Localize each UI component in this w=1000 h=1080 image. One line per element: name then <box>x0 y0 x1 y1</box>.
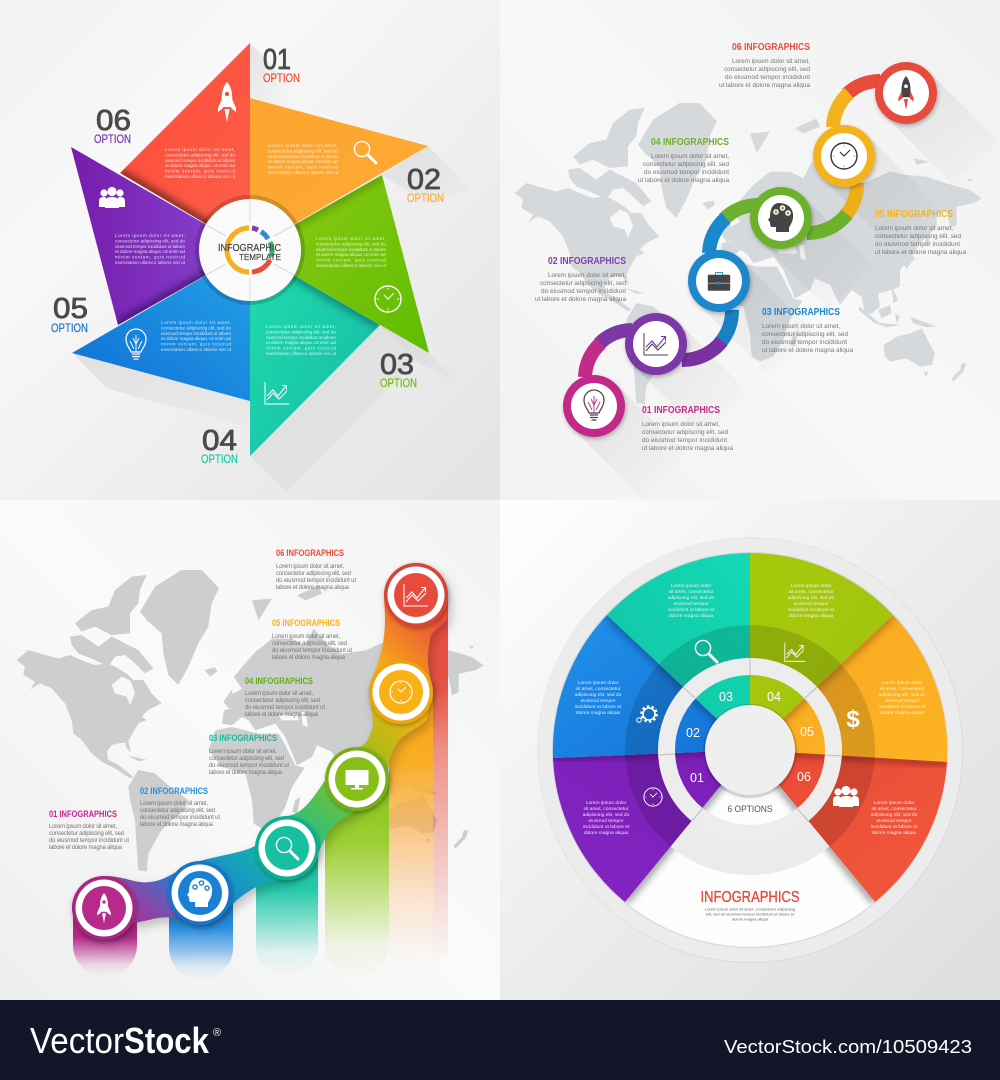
sector text 06: sit amet, consectetur <box>871 806 917 812</box>
caption 05: consectetur adipiscing elit, sed <box>875 233 961 240</box>
text block orange: minim veniam, quis nostrud <box>268 165 338 170</box>
text block red: Lorem ipsum dolor sit amet, <box>165 147 235 152</box>
text block orange <box>268 143 339 175</box>
caption 04: consectetur adipiscing elit, sed <box>643 161 729 168</box>
caption 06: 06 INFOGRAPHICS <box>732 42 810 53</box>
caption 03: labore et dolore magna aliqua <box>209 770 283 776</box>
caption 03: ut labore et dolore magna aliqua <box>762 347 853 354</box>
sector text 02 <box>575 680 622 716</box>
caption 05: do eiusmod tempor incididunt ut <box>272 648 352 654</box>
sector text 01: Lorem ipsum dolor <box>586 800 627 806</box>
caption 06: do eiusmod tempor incididunt <box>725 74 810 81</box>
label 06 option: 06 <box>96 105 131 137</box>
label 04 option: 04 <box>202 425 237 457</box>
sector text 02: Lorem ipsum dolor <box>578 680 619 686</box>
text block blue: minim veniam, quis nostrud <box>161 342 231 347</box>
text block purple: Lorem ipsum dolor sit amet, <box>115 233 185 238</box>
caption 02: do eiusmod tempor incididunt ut <box>140 815 220 821</box>
label 01 option <box>263 44 300 85</box>
text block green: minim veniam, quis nostrud <box>316 258 386 263</box>
wheel title: dolore magna aliqua <box>732 916 769 922</box>
caption 05: ut labore et dolore magna aliqua <box>875 249 966 256</box>
caption 01: consectetur adipiscing elit, sed <box>642 429 728 436</box>
sector text 03: sit amet, consectetur <box>668 589 714 595</box>
caption 01: ut labore et dolore magna aliqua <box>642 445 733 452</box>
caption 02: consectetur adipiscing elit, sed <box>540 280 626 287</box>
icon: chart <box>785 643 805 661</box>
grey ring <box>658 658 842 834</box>
sector numbers <box>686 690 814 785</box>
panel: world map winding path <box>500 0 1000 500</box>
caption 01: labore et dolore magna aliqua <box>49 845 123 851</box>
step 02 ring <box>168 861 232 925</box>
step 01 ring <box>72 876 136 940</box>
label 02 option <box>407 164 444 205</box>
panel: circular six options <box>500 500 1000 1000</box>
text block teal: eiusmod tempor incididunt ut labore <box>266 335 336 340</box>
segment 05 blue <box>72 276 250 401</box>
light band on white sector <box>670 821 830 875</box>
sector text 01: adipiscing elit, sed do <box>583 812 630 818</box>
sector text 01: sit amet, consectetur <box>583 806 629 812</box>
text block orange: exercitation ullamco laboris nisi ut <box>268 170 339 175</box>
world map <box>515 103 982 405</box>
sector text 05: incididunt ut labore et <box>879 704 926 710</box>
sector text 03: eiusmod tempor <box>673 601 709 607</box>
sector numbers: 04 <box>767 690 781 704</box>
wheel sector white <box>626 784 875 947</box>
step 05 circle <box>813 125 875 187</box>
wheel title <box>700 889 800 922</box>
sector text 03: dolore magna aliqua <box>669 613 713 619</box>
text block teal: et dolore magna aliqua. Ut enim ad <box>266 340 336 345</box>
segment 01 red <box>120 43 250 224</box>
text block purple: eiusmod tempor incididunt ut labore <box>115 244 185 249</box>
text block orange: Lorem ipsum dolor sit amet, <box>268 143 338 148</box>
icon: people <box>99 187 125 208</box>
sector numbers: 03 <box>719 690 733 704</box>
caption 01 <box>49 809 129 851</box>
caption 01: do eiusmod tempor incididunt <box>642 437 727 444</box>
rainbow ribbon <box>72 563 448 939</box>
text block green: exercitation ullamco laboris nisi ut <box>316 263 387 268</box>
sector text 03: Lorem ipsum dolor <box>671 583 712 589</box>
caption 03: Lorem ipsum dolor sit amet, <box>762 323 840 330</box>
caption 02: Lorem ipsum dolor sit amet, <box>140 801 208 807</box>
segment 02 orange <box>250 98 428 224</box>
caption 06: labore et dolore magna aliqua <box>276 585 350 591</box>
text block orange: et dolore magna aliqua. Ut enim ad <box>268 159 338 164</box>
wheel sector 04 green <box>750 553 893 719</box>
brand logo: ® <box>213 1027 221 1039</box>
caption 06: 06 INFOGRAPHICS <box>276 548 344 559</box>
caption 03: 03 INFOGRAPHICS <box>209 733 277 744</box>
sector text 03: adipiscing elit, sed do <box>668 595 715 601</box>
brand logo: Vector <box>30 1020 124 1061</box>
segment 03 green <box>294 175 429 353</box>
sector text 05: Lorem ipsum dolor <box>882 680 923 686</box>
text block teal: minim veniam, quis nostrud <box>266 346 336 351</box>
long shadows of the pinwheel <box>72 43 470 492</box>
icon: dollar: $ <box>846 706 860 733</box>
caption 06: do eiusmod tempor incididunt ut <box>276 578 356 584</box>
text block purple: exercitation ullamco laboris nisi ut <box>115 260 186 265</box>
label 06 option: OPTION <box>94 134 131 146</box>
sector text 06: adipiscing elit, sed do <box>871 812 918 818</box>
caption 04: ut labore et dolore magna aliqua <box>638 177 729 184</box>
wheel title: Lorem ipsum dolor sit amet, consectetur adipiscing <box>705 906 795 912</box>
sector text 01 <box>583 800 630 836</box>
caption 06: Lorem ipsum dolor sit amet, <box>732 58 810 65</box>
icon: magnifier <box>695 640 717 662</box>
label 05 option: OPTION <box>51 323 88 335</box>
caption 05: consectetur adipiscing elit, sed <box>272 641 347 647</box>
caption 03 <box>209 733 289 776</box>
label 03 option: 03 <box>380 349 414 381</box>
wheel sector 06 red <box>778 752 947 902</box>
text block green: Lorem ipsum dolor sit amet, <box>316 236 386 241</box>
sector numbers: 01 <box>690 771 704 785</box>
step 03 circle <box>688 250 750 312</box>
icon: rocket <box>218 82 236 122</box>
step 04 circle <box>750 187 812 249</box>
caption 05 <box>272 618 352 661</box>
text block teal: consectetur adipiscing elit, sed do <box>266 329 336 334</box>
caption 05: Lorem ipsum dolor sit amet, <box>272 634 340 640</box>
caption 04: labore et dolore magna aliqua <box>245 712 319 718</box>
icon: clock <box>375 286 401 312</box>
sector text 02: eiusmod tempor <box>580 698 616 704</box>
label 02 option: OPTION <box>407 193 444 205</box>
text block blue: exercitation ullamco laboris nisi ut <box>161 347 232 352</box>
image id: VectorStock.com/10509423 <box>724 1036 972 1057</box>
world map <box>17 570 484 872</box>
segment 04 teal <box>250 276 380 456</box>
text block green <box>316 236 387 268</box>
icon: gear <box>637 706 657 722</box>
caption 03: do eiusmod tempor incididunt <box>762 339 847 346</box>
caption 02 <box>140 786 220 828</box>
caption 06: consectetur adipiscing elit, sed <box>276 571 351 577</box>
brand logo: Stock <box>124 1020 210 1061</box>
text block purple: et dolore magna aliqua. Ut enim ad <box>115 249 185 254</box>
sector text 05: dolore magna aliqua <box>880 710 924 716</box>
sector text 04: dolore magna aliqua <box>789 613 833 619</box>
long shadows of circles <box>575 74 970 470</box>
label 05 option <box>51 293 88 335</box>
caption 01: Lorem ipsum dolor sit amet, <box>49 824 117 830</box>
wheel sector 05 orange <box>782 615 948 762</box>
text block red: et dolore magna aliqua. Ut enim ad <box>165 163 235 168</box>
caption 05: do eiusmod tempor incididunt <box>875 241 960 248</box>
text block green: eiusmod tempor incididunt ut labore <box>316 247 386 252</box>
caption 02: do eiusmod tempor incididunt <box>541 288 626 295</box>
caption 02: 02 INFOGRAPHICS <box>140 786 208 797</box>
text block purple <box>115 233 186 265</box>
sector numbers: 05 <box>800 725 814 739</box>
caption 01 <box>642 405 733 452</box>
wheel sector 02 blue <box>552 615 718 758</box>
caption 04: do eiusmod tempor incididunt ut <box>245 705 325 711</box>
winding connectors <box>585 81 880 377</box>
sector text 04 <box>788 583 835 619</box>
caption 03: 03 INFOGRAPHICS <box>762 307 840 318</box>
outer ring <box>537 537 963 963</box>
caption 06 <box>719 42 810 89</box>
label 03 option <box>380 349 417 390</box>
label 01 option: 01 <box>263 44 291 76</box>
ribbon shadow <box>75 568 451 944</box>
sector text 04: Lorem ipsum dolor <box>791 583 832 589</box>
sector text 06: dolore magna aliqua <box>872 830 916 836</box>
text block blue: consectetur adipiscing elit, sed do <box>161 325 231 330</box>
sector text 04: incididunt ut labore et <box>788 607 835 613</box>
wheel sector 01 purple <box>553 752 722 902</box>
caption 04 <box>245 676 325 718</box>
icon: chart <box>265 382 289 404</box>
step 06 ring <box>384 563 448 627</box>
sector text 02: incididunt ut labore et <box>575 704 622 710</box>
caption 01: 01 INFOGRAPHICS <box>642 405 720 416</box>
sector text 01: incididunt ut labore et <box>583 824 630 830</box>
sector text 02: adipiscing elit, sed do <box>575 692 622 698</box>
caption 05 <box>875 209 966 256</box>
segment 06 purple <box>71 147 206 325</box>
caption 02: consectetur adipiscing elit, sed <box>140 808 215 814</box>
sector text 06 <box>871 800 918 836</box>
text block red: exercitation ullamco laboris nisi ut <box>165 174 236 179</box>
sector text 05: eiusmod tempor <box>884 698 920 704</box>
sector text 01: dolore magna aliqua <box>584 830 628 836</box>
centre badge <box>195 195 305 305</box>
caption 04 <box>638 137 729 184</box>
step 01 circle <box>563 375 625 437</box>
sector text 05: sit amet, consectetur <box>879 686 925 692</box>
caption 03: consectetur adipiscing elit, sed <box>209 756 284 762</box>
caption 06: consectetur adipiscing elit, sed <box>724 66 810 73</box>
text block purple: consectetur adipiscing elit, sed do <box>115 238 185 243</box>
wheel title: elit, sed do eiusmod tempor incididunt ut labore et <box>706 912 795 916</box>
icon: bulb <box>126 329 146 359</box>
caption 01: Lorem ipsum dolor sit amet, <box>642 421 720 428</box>
label 04 option: OPTION <box>201 454 238 466</box>
text block blue: Lorem ipsum dolor sit amet, <box>161 320 231 325</box>
dark band <box>642 642 858 858</box>
wheel title: INFOGRAPHICS <box>700 889 800 906</box>
text block blue: eiusmod tempor incididunt ut labore <box>161 331 231 336</box>
panel: rising ribbon chart <box>0 500 500 1000</box>
caption 06 <box>276 548 356 591</box>
caption 05: Lorem ipsum dolor sit amet, <box>875 225 953 232</box>
caption 05: 05 INFOGRAPHICS <box>875 209 953 220</box>
caption 04: Lorem ipsum dolor sit amet, <box>245 691 313 697</box>
panel: pinwheel six options <box>0 0 500 500</box>
caption 02: labore et dolore magna aliqua <box>140 822 214 828</box>
text block purple: minim veniam, quis nostrud <box>115 255 185 260</box>
caption 02: Lorem ipsum dolor sit amet, <box>548 272 626 279</box>
wheel sector 03 teal <box>607 553 750 750</box>
text block blue <box>161 320 232 352</box>
label 06 option <box>94 105 131 146</box>
caption 04: 04 INFOGRAPHICS <box>245 676 313 687</box>
text block teal <box>266 324 337 356</box>
label 02 option: 02 <box>407 164 441 196</box>
text block orange: eiusmod tempor incididunt ut labore <box>268 154 338 159</box>
sector text 02: sit amet, consectetur <box>575 686 621 692</box>
caption 01: consectetur adipiscing elit, sed <box>49 831 124 837</box>
sector text 01: eiusmod tempor <box>588 818 624 824</box>
caption 03: do eiusmod tempor incididunt ut <box>209 763 289 769</box>
sector text 04: sit amet, consectetur <box>788 589 834 595</box>
centre badge: TEMPLATE <box>239 252 281 262</box>
step 06 circle <box>875 62 937 124</box>
step 02 circle <box>625 313 687 375</box>
step 05 ring <box>369 660 433 724</box>
label 03 option: OPTION <box>380 378 417 390</box>
centre hub <box>703 704 797 798</box>
caption 03: Lorem ipsum dolor sit amet, <box>209 749 277 755</box>
label: 6 options: 6 OPTIONS <box>728 804 772 815</box>
caption 03: consectetur adipiscing elit, sed <box>762 331 848 338</box>
fading bars <box>73 595 448 980</box>
sector text 06: eiusmod tempor <box>876 818 912 824</box>
icon: people <box>833 786 859 807</box>
text block orange: consectetur adipiscing elit, sed do <box>268 148 338 153</box>
sector text 03: incididunt ut labore et <box>668 607 715 613</box>
step 03 ring <box>255 816 319 880</box>
sector text 02: dolore magna aliqua <box>576 710 620 716</box>
caption 05: 05 INFOGRAPHICS <box>272 618 340 629</box>
centre badge: INFOGRAPHIC <box>218 242 281 254</box>
sector numbers: 06 <box>797 770 811 784</box>
caption 05: labore et dolore magna aliqua <box>272 655 346 661</box>
label 01 option: OPTION <box>263 73 300 85</box>
text block red: consectetur adipiscing elit, sed do <box>165 152 235 157</box>
text block green: et dolore magna aliqua. Ut enim ad <box>316 252 386 257</box>
brand logo <box>30 1020 221 1061</box>
icon: magnifier <box>354 141 376 163</box>
sector text 03 <box>668 583 715 619</box>
text block red <box>165 147 236 179</box>
caption 01: 01 INFOGRAPHICS <box>49 809 117 820</box>
footer band <box>0 1000 1000 1080</box>
text block blue: et dolore magna aliqua. Ut enim ad <box>161 336 231 341</box>
caption 04: 04 INFOGRAPHICS <box>651 137 729 148</box>
text block teal: exercitation ullamco laboris nisi ut <box>266 351 337 356</box>
sector text 06: incididunt ut labore et <box>871 824 918 830</box>
sector text 04: adipiscing elit, sed do <box>788 595 835 601</box>
step 04 ring <box>325 747 389 811</box>
caption 06: ut labore et dolore magna aliqua <box>719 82 810 89</box>
text block red: minim veniam, quis nostrud <box>165 169 235 174</box>
text block red: eiusmod tempor incididunt ut labore <box>165 158 235 163</box>
label 04 option <box>201 425 238 466</box>
sector numbers: 02 <box>686 726 700 740</box>
caption 02 <box>535 256 626 303</box>
sector text 06: Lorem ipsum dolor <box>874 800 915 806</box>
caption 04: consectetur adipiscing elit, sed <box>245 698 320 704</box>
caption 02: 02 INFOGRAPHICS <box>548 256 626 267</box>
sector text 05: adipiscing elit, sed do <box>879 692 926 698</box>
caption 04: do eiusmod tempor incididunt <box>644 169 729 176</box>
caption 02: ut labore et dolore magna aliqua <box>535 296 626 303</box>
caption 03 <box>762 307 853 354</box>
caption 04: Lorem ipsum dolor sit amet, <box>651 153 729 160</box>
caption 01: do eiusmod tempor incididunt ut <box>49 838 129 844</box>
caption 06: Lorem ipsum dolor sit amet, <box>276 564 344 570</box>
text block green: consectetur adipiscing elit, sed do <box>316 241 386 246</box>
sector text 05 <box>879 680 926 716</box>
icon: clock <box>644 788 662 806</box>
text block teal: Lorem ipsum dolor sit amet, <box>266 324 336 329</box>
label 05 option: 05 <box>53 293 88 325</box>
sector text 04: eiusmod tempor <box>793 601 829 607</box>
